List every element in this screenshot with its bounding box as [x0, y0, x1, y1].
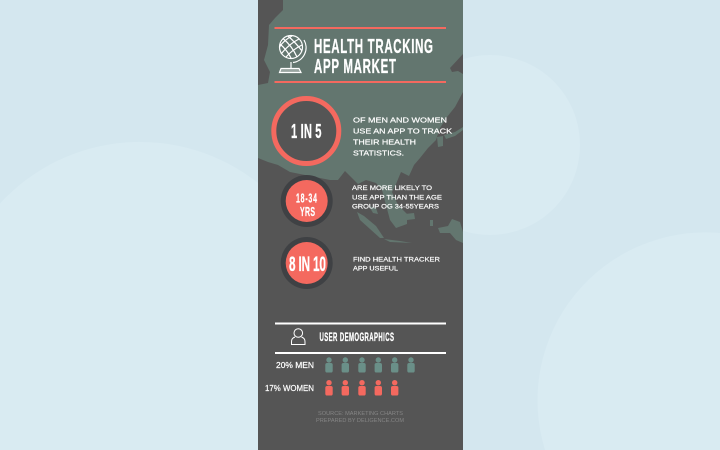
stat: 8 in 10: APP USEFUL: [353, 266, 398, 273]
stat: 18-34 yrs: ARE MORE LIKELY TO: [352, 185, 432, 192]
stat: 18-34 yrs: USE APP THAN THE AGE: [352, 194, 443, 201]
stat: 1 in 5: USE AN APP TO TRACK: [353, 126, 452, 136]
stat: 8 in 10: [281, 237, 440, 289]
section: user demographics: USER DEMOGRAPHICS: [320, 331, 394, 345]
row: women 17%: 17% WOMEN: [265, 384, 314, 393]
stat: 8 in 10: FIND HEALTH TRACKER: [353, 256, 440, 263]
stat: 18-34 yrs: 18-34: [296, 193, 317, 206]
icon: globe: [280, 36, 306, 72]
heading: [314, 34, 433, 78]
icon: person: [291, 329, 305, 344]
source note: PREPARED BY DELIGENCE.COM: [316, 418, 404, 424]
source note: SOURCE: MARKETING CHARTS: [318, 411, 403, 417]
stat: 1 in 5: STATISTICS.: [353, 148, 404, 158]
stat: 18-34 yrs: YRS: [300, 206, 315, 220]
stat: 1 in 5: OF MEN AND WOMEN: [353, 116, 447, 124]
stat: 8 in 10: 8 IN 10: [289, 252, 326, 276]
stat: 1 in 5: [274, 98, 452, 164]
heading: HEALTH TRACKING: [314, 34, 433, 58]
stat: 1 in 5: 1 IN 5: [291, 121, 322, 143]
title block: [274, 27, 446, 83]
panel: infographic background with map: [258, 0, 463, 450]
row: women 17%: [265, 380, 398, 396]
row: men 20%: 20% MEN: [276, 361, 314, 370]
stat: 18-34 yrs: [281, 175, 443, 227]
source note: [316, 411, 404, 424]
stat: 1 in 5: THEIR HEALTH: [353, 138, 416, 146]
stat: 18-34 yrs: GROUP OG 34-55YEARS: [352, 204, 440, 211]
heading: APP MARKET: [314, 54, 396, 78]
row: men 20%: [276, 357, 415, 372]
section: user demographics: [275, 322, 446, 354]
